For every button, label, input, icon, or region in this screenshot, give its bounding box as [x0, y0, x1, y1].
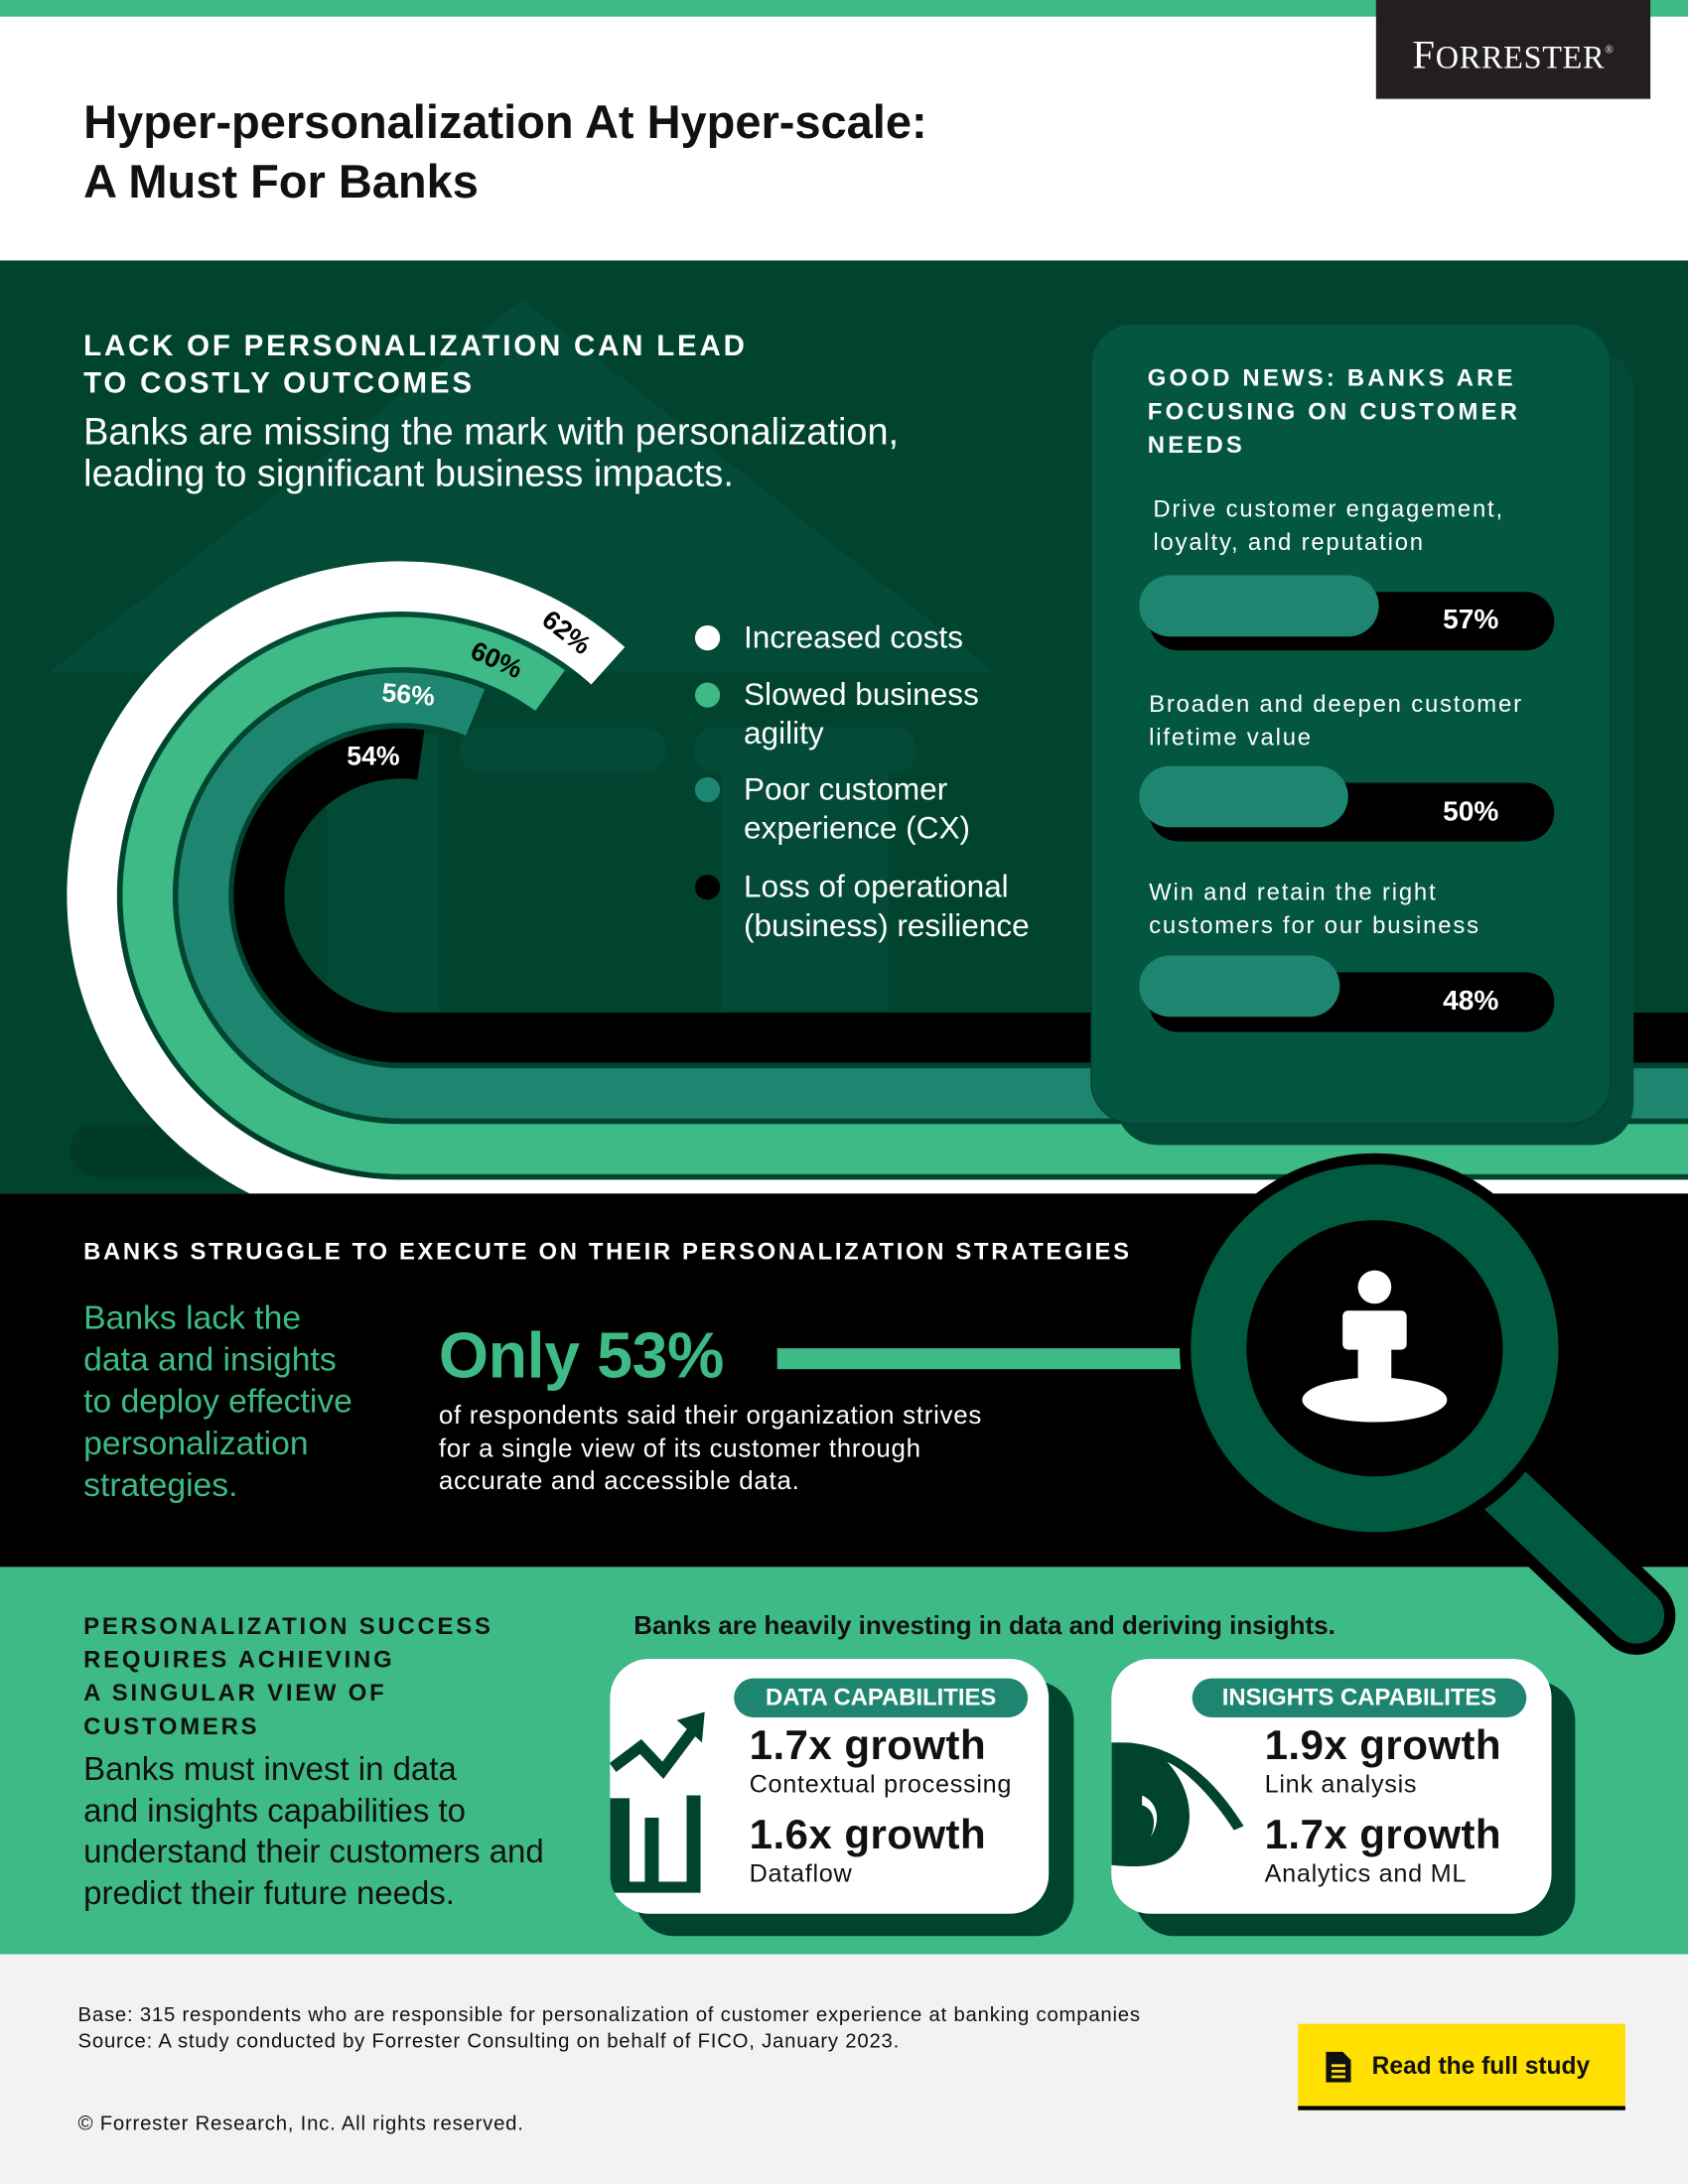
heading: singular view: A SINGULAR VIEW OF [83, 1680, 386, 1706]
logo: Forrester: FORRESTER® [1412, 33, 1615, 77]
card: insights capabilities: Analytics and ML [1265, 1859, 1467, 1887]
legend: Loss of operational [744, 870, 1009, 904]
legend: Increased costs [744, 619, 963, 654]
bar 57% [1139, 495, 1555, 651]
legend: (business) resilience [744, 908, 1030, 943]
footer text: base and source: Source: A study conducted by Forrester Consulting on behalf of FICO, January 2023. [78, 2031, 900, 2053]
heading: lack of personalization [83, 331, 748, 400]
logo: Forrester [1376, 0, 1650, 99]
card: insights capabilities: 1.9x growth [1265, 1723, 1501, 1769]
heading: singular view: REQUIRES ACHIEVING [83, 1646, 394, 1673]
icon: magnifier with person [1180, 1154, 1676, 1655]
bar 50%: 50% [1443, 797, 1498, 827]
heading: struggle: BANKS STRUGGLE TO EXECUTE ON THEIR PERSONALIZATION STRATEGIES [83, 1238, 1132, 1265]
top stripe [0, 0, 1688, 17]
button: read the full study: Read the full study [1372, 2052, 1590, 2080]
pill: data capabilities [734, 1679, 1028, 1717]
bar 57%: 57% [1443, 605, 1498, 635]
bar 57%: Drive customer engagement, [1153, 495, 1504, 522]
text: invest: Banks must invest in data [83, 1751, 457, 1787]
text: banks lack data: personalization [83, 1425, 309, 1462]
background house illustration [67, 561, 1688, 1193]
heading: good news: FOCUSING ON CUSTOMER [1148, 398, 1520, 425]
title: Hyper-personalization At Hyper-scale: [83, 97, 927, 149]
text: banks lack data: Banks lack the [83, 1299, 301, 1337]
text: invest: and insights capabilities to [83, 1792, 466, 1829]
text: banks lack data: to deploy effective [83, 1383, 352, 1421]
stat: only 53% [439, 1319, 1182, 1494]
bar 50% [1139, 691, 1555, 842]
pill: insights capabilities: INSIGHTS CAPABILITES [1222, 1684, 1496, 1710]
card: data capabilities: Dataflow [750, 1859, 852, 1887]
bar 48%: Win and retain the right [1149, 879, 1437, 905]
bar 50%: Broaden and deepen customer [1149, 691, 1523, 718]
text: banks lack data: strategies. [83, 1466, 237, 1504]
panel: struggle [0, 1193, 1688, 1567]
stat: only 53%: of respondents said their organization strives [439, 1400, 982, 1430]
pill: insights capabilities [1193, 1679, 1526, 1717]
stat: only 53%: for a single view of its customer through [439, 1433, 921, 1462]
text: invest [83, 1751, 544, 1911]
heading: singular view: CUSTOMERS [83, 1713, 259, 1739]
footer text: base and source: Base: 315 respondents who are responsible for personalization of customer experience at banking companies [78, 2004, 1141, 2026]
subtitle: leading to significant business impacts. [83, 453, 734, 494]
card: insights capabilities: Link analysis [1265, 1770, 1417, 1798]
card: insights capabilities [1111, 1659, 1575, 1936]
panel: costly outcomes: 54% [347, 743, 400, 771]
legend: agility [744, 716, 824, 751]
text: banks lack data [83, 1299, 352, 1504]
icon: bar chart growth [610, 1711, 705, 1893]
title [83, 97, 927, 208]
pill: data capabilities: DATA CAPABILITIES [766, 1684, 996, 1710]
panel: costly outcomes [0, 260, 1688, 1193]
legend: Slowed business [744, 677, 979, 712]
header [0, 17, 1688, 260]
text: invest: understand their customers and [83, 1833, 544, 1869]
title: A Must For Banks [83, 158, 479, 208]
subtitle [83, 411, 899, 494]
panel: costly outcomes: 60% [466, 637, 526, 685]
legend: Poor customer [744, 771, 947, 806]
bar 48%: 48% [1443, 986, 1498, 1017]
arcs chart [67, 561, 1688, 1230]
panel: singular view [0, 1567, 1688, 1954]
card: data capabilities: 1.7x growth [750, 1723, 986, 1769]
heading: singular view [83, 1613, 493, 1739]
icon: eye [1111, 1742, 1243, 1866]
bar 50%: lifetime value [1149, 725, 1313, 751]
panel: good news [1090, 325, 1634, 1146]
heading: singular view: PERSONALIZATION SUCCESS [83, 1613, 493, 1639]
heading: good news [1148, 365, 1520, 459]
bar 57%: loyalty, and reputation [1153, 529, 1425, 556]
bar 48% [1139, 879, 1555, 1032]
heading: good news: NEEDS [1148, 432, 1245, 459]
text: banks lack data: data and insights [83, 1341, 337, 1379]
heading: lack of personalization: LACK OF PERSONALIZATION CAN LEAD [83, 331, 748, 362]
icon: document [1326, 2051, 1350, 2083]
heading: good news: GOOD NEWS: BANKS ARE [1148, 365, 1516, 391]
card: data capabilities [610, 1659, 1074, 1936]
card: data capabilities: 1.6x growth [750, 1812, 986, 1858]
legend: experience (CX) [744, 811, 970, 846]
footer text: copyright: © Forrester Research, Inc. All rights reserved. [78, 2113, 524, 2135]
card: insights capabilities: 1.7x growth [1265, 1812, 1501, 1858]
text: investing: Banks are heavily investing in data and deriving insights. [633, 1610, 1336, 1639]
arc labels: 62% [536, 606, 596, 661]
card: data capabilities: Contextual processing [750, 1770, 1012, 1798]
stat: only 53%: accurate and accessible data. [439, 1465, 799, 1494]
stat: only 53%: Only 53% [439, 1319, 724, 1392]
panel: costly outcomes: 56% [380, 679, 436, 713]
footer [0, 1954, 1688, 2184]
bar 48%: customers for our business [1149, 912, 1480, 939]
footer text: base and source [78, 2004, 1141, 2053]
heading: lack of personalization: TO COSTLY OUTCOMES [83, 367, 475, 400]
text: invest: predict their future needs. [83, 1874, 455, 1910]
legend [695, 619, 1030, 943]
button: read the full study [1298, 2024, 1625, 2111]
subtitle: Banks are missing the mark with personalization, [83, 411, 899, 453]
